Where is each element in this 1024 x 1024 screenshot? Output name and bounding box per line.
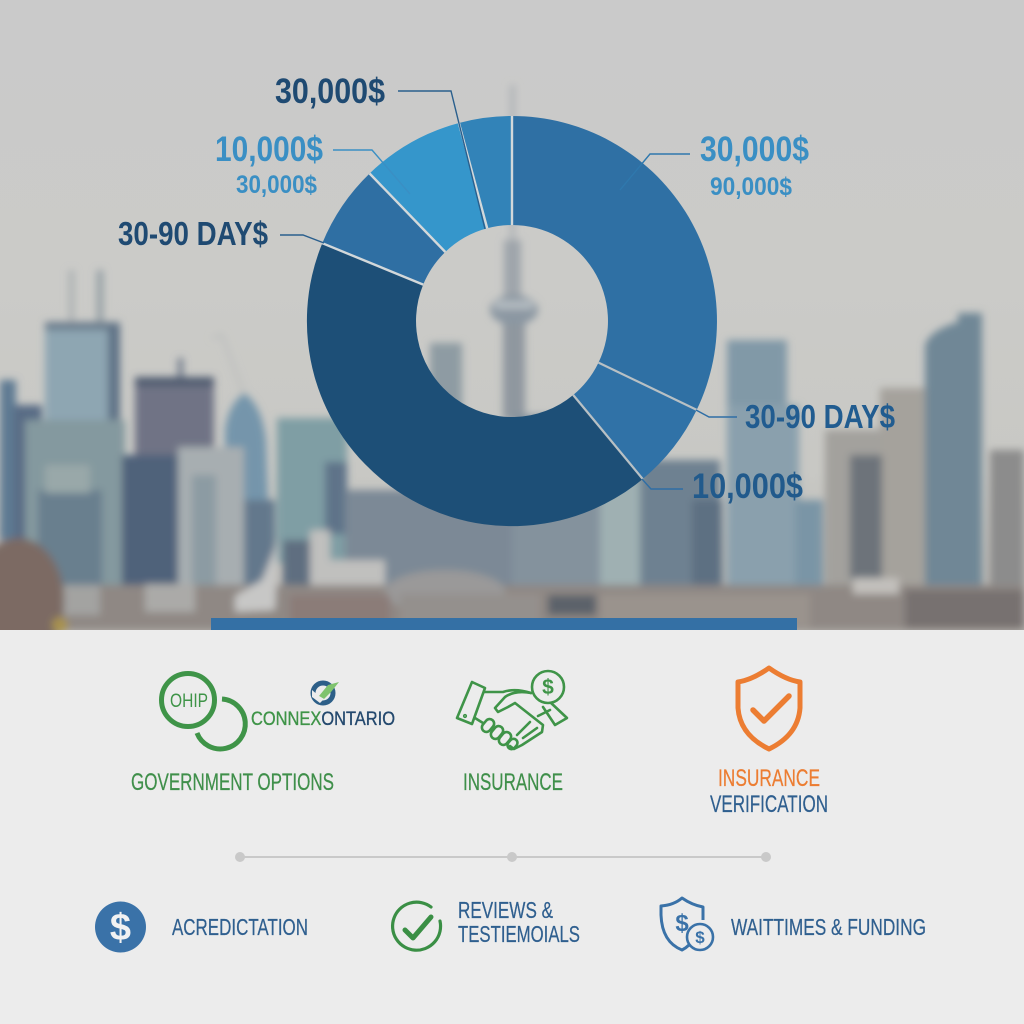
label: reviews and testimonials: REVIEWS & <box>458 897 553 923</box>
label: upper right values: 90,000$ <box>710 173 792 201</box>
logo wordmark: CONNEXONTARIO <box>251 709 395 730</box>
segment: left slice <box>322 174 445 285</box>
label: top left value: 30,000$ <box>275 72 385 111</box>
label: reviews and testimonials: TESTIEMOIALS <box>458 921 580 947</box>
icon: OHIP linked rings: OHIP <box>170 691 208 712</box>
label: upper left values <box>215 130 323 199</box>
heading: insurance: INSURANCE <box>463 769 563 796</box>
donut chart <box>307 116 717 526</box>
icon: OHIP linked rings <box>162 674 245 749</box>
icon: shield with dollar coin: $ <box>675 910 689 937</box>
label: lower right value: 10,000$ <box>692 467 803 506</box>
segment: lower right slice <box>573 363 697 479</box>
segment: bright slice <box>370 123 487 252</box>
divider with dots <box>235 852 771 862</box>
icon: ConnexOntario logo <box>251 682 395 730</box>
heading: insurance verification: VERIFICATION <box>710 791 828 818</box>
segment: top slice <box>459 116 512 228</box>
label: upper left values: 10,000$ <box>215 130 323 169</box>
label: left days: 30-90 DAY$ <box>118 215 268 252</box>
segment: main blue slice <box>512 116 717 410</box>
label: upper right values: 30,000$ <box>700 130 809 169</box>
leader lines <box>280 91 737 489</box>
heading: insurance verification: INSURANCE <box>718 765 820 792</box>
heading: insurance verification <box>710 765 828 818</box>
icon: handshake with coin <box>457 671 567 751</box>
label: right days: 30-90 DAY$ <box>745 398 895 435</box>
icon: dollar circle: $ <box>110 907 131 949</box>
icon: orange shield check <box>738 668 800 749</box>
heading: government options: GOVERNMENT OPTIONS <box>131 769 334 796</box>
label: wait times and funding: WAITTIMES & FUNDING <box>731 914 926 940</box>
icon: green check circle <box>393 902 441 950</box>
background: blurred city skyline <box>0 0 1024 662</box>
icon: dollar circle <box>95 902 146 952</box>
label: upper left values: 30,000$ <box>236 171 317 199</box>
icon: shield with dollar coin <box>661 898 713 950</box>
accent bar <box>211 618 797 630</box>
label: upper right values <box>700 130 809 201</box>
label: reviews and testimonials <box>458 897 580 947</box>
icon: shield with dollar coin: $ <box>695 928 705 947</box>
label: accreditation: ACREDICTATION <box>172 914 308 940</box>
panel: lower information panel <box>0 630 1024 1024</box>
segment: large dark slice <box>307 243 643 526</box>
icon: handshake with coin: $ <box>542 676 554 699</box>
